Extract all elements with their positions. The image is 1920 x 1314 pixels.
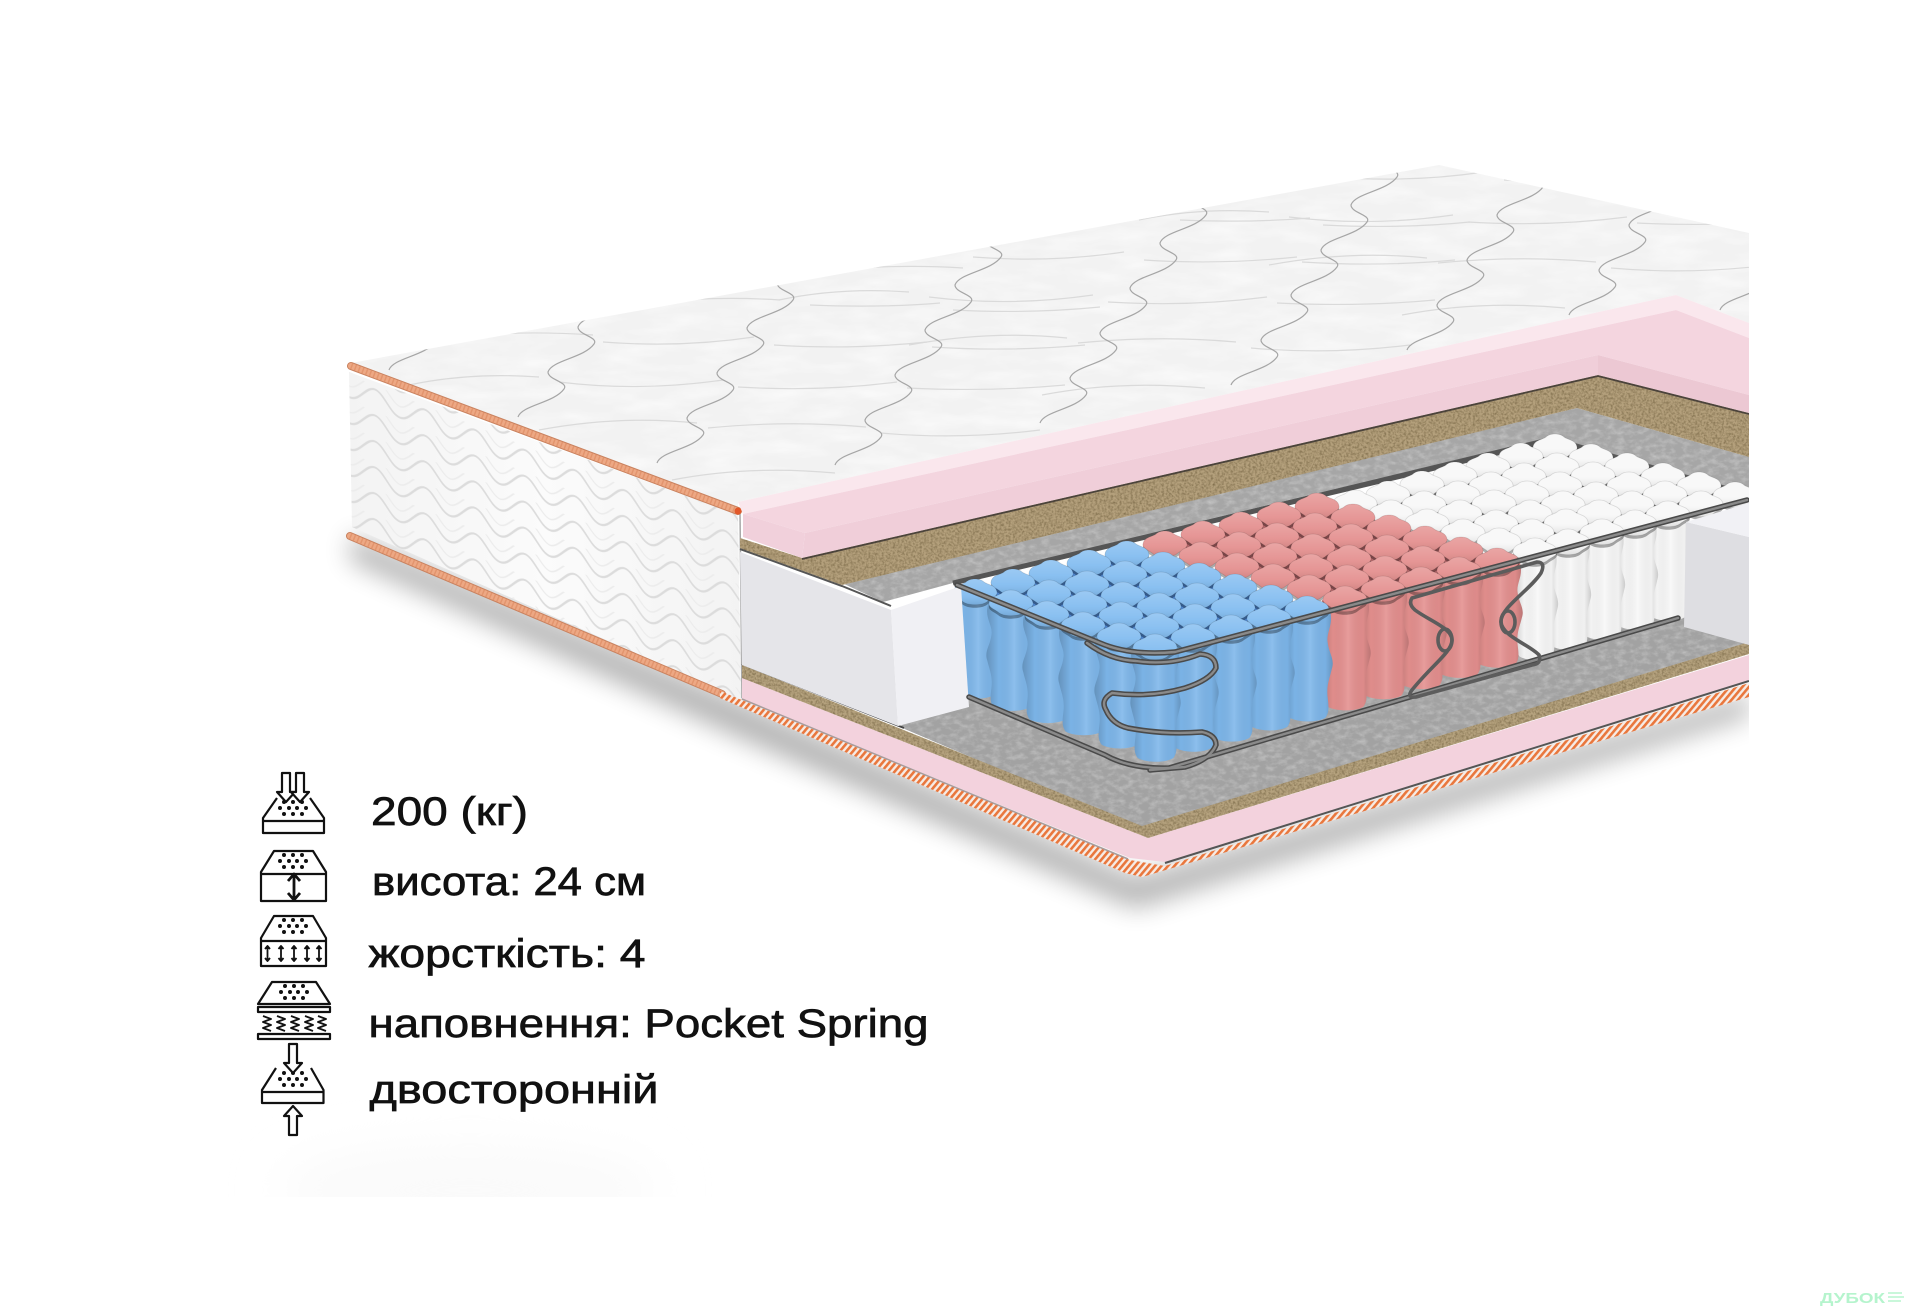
left foam edge block (740, 549, 969, 726)
icon: mattress firmness arrows (261, 916, 326, 966)
blue spring tops (953, 541, 1329, 663)
text: height: висота: 24 см (372, 860, 646, 904)
text: filling: наповнення: Pocket Spring (368, 1002, 928, 1046)
pocket spring unit (950, 434, 1757, 762)
spec row: filling Pocket Spring (258, 982, 928, 1046)
spec row: height 24 cm (261, 851, 646, 904)
watermark logo (1820, 1290, 1904, 1307)
bottom pink foam layer (742, 655, 1749, 863)
spring columns: side rows (950, 515, 1691, 762)
text: double-sided: двосторонній (370, 1068, 658, 1112)
spec row: double-sided (262, 1044, 658, 1135)
orange hatched border strip (720, 683, 1749, 877)
text: 200 kg: 200 (кг) (371, 790, 528, 834)
bottom felt layer floor (901, 618, 1744, 826)
upper pink foam layer (738, 295, 1749, 559)
spec row: firmness 4 (261, 916, 646, 976)
watermark logo: ДУБОК (1820, 1290, 1886, 1307)
top edge piping rope (351, 366, 742, 514)
upper coir layer (740, 375, 1749, 585)
infographic: mattress cross-section with specification list (256, 165, 1904, 1306)
mattress illustration (349, 0, 1920, 908)
white spring tops (1333, 434, 1757, 567)
icon: mattress with arrows from both sides (262, 1044, 324, 1135)
spec row: load 200 kg (263, 773, 528, 834)
icon: mattress layers with springs (258, 982, 330, 1039)
mattress floor shadow (350, 535, 1749, 908)
icon: two arrows pressing mattress (263, 773, 324, 833)
upper felt layer (842, 408, 1749, 602)
bottom coir layer (742, 642, 1749, 838)
pink spring tops (1143, 493, 1519, 615)
text: firmness: жорсткість: 4 (368, 932, 646, 976)
icon: mattress height arrow (261, 851, 326, 901)
bottom edge piping rope (350, 536, 722, 694)
quilted top surface (354, 165, 1749, 506)
specification list (258, 773, 928, 1135)
steel wire frame with hooks (957, 500, 1747, 770)
mattress side panel with wave quilting (349, 372, 742, 700)
right foam edge block (1684, 503, 1749, 645)
back wire of spring frame (952, 444, 1651, 586)
